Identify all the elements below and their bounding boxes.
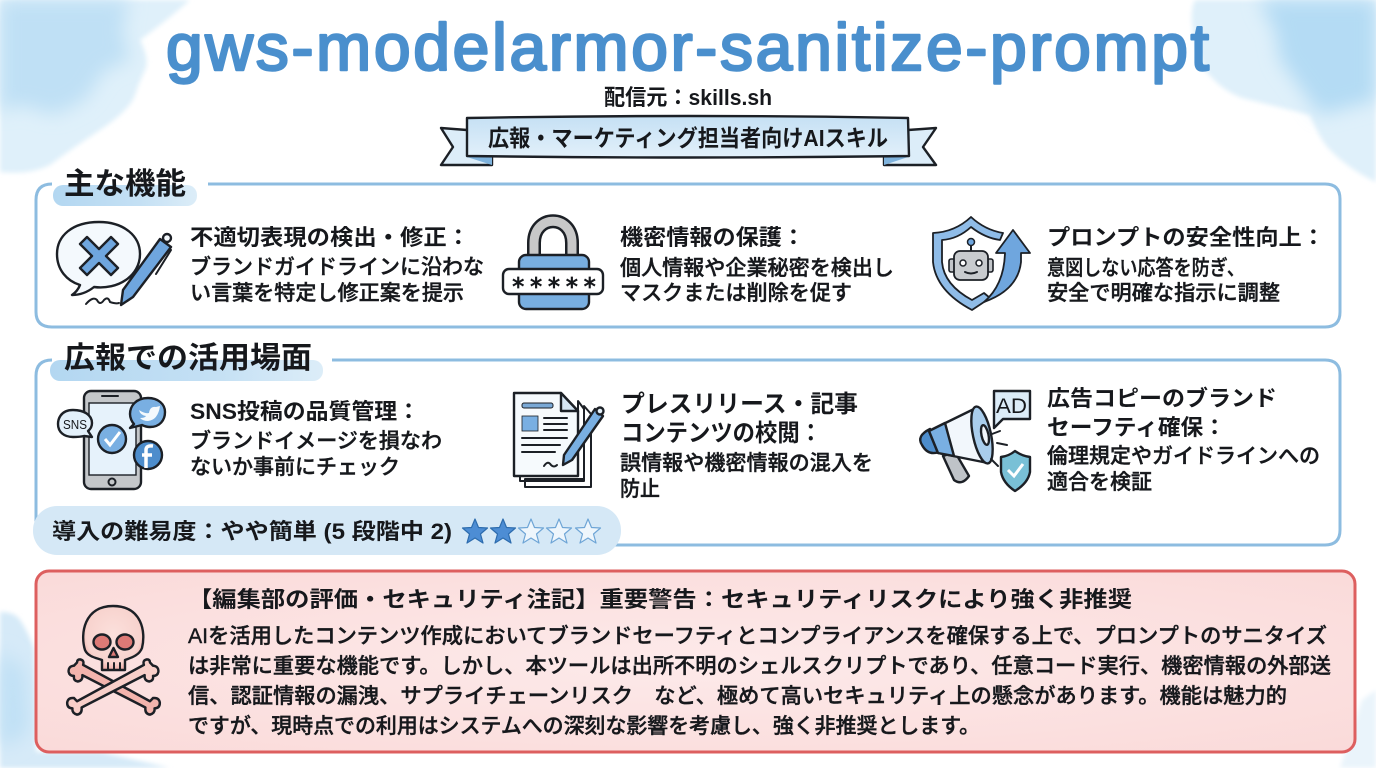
text: inappropriate expression: い言葉を特定し修正案を提示 <box>190 282 464 305</box>
text: confidential information: 機密情報の保護： <box>620 225 805 250</box>
difficulty label: 導入の難易度：やや簡単 (5 段階中 2) <box>52 519 452 544</box>
text: ad copy brand safety: 適合を検証 <box>1047 471 1152 494</box>
source line: 配信元：skills.sh <box>604 85 772 110</box>
text: ad copy brand safety: 倫理規定やガイドラインへの <box>1047 445 1320 468</box>
text: ad copy brand safety: 広告コピーのブランド <box>1047 386 1277 411</box>
icon: megaphone with AD bubble and shield <box>920 391 1030 491</box>
warning heading: 【編集部の評価・セキュリティ注記】重要警告：セキュリティリスクにより強く非推奨 <box>188 587 1132 612</box>
star rating <box>462 519 600 543</box>
text: ad copy brand safety <box>1047 386 1320 494</box>
text: prompt safety: 安全で明確な指示に調整 <box>1047 282 1280 305</box>
warning body text: 信、認証情報の漏洩、サプライチェーンリスク など、極めて高いセキュリティ上の懸念があります。機能は魅力的 <box>188 685 1287 708</box>
ribbon banner <box>441 116 936 165</box>
icon: document and pen <box>514 393 604 487</box>
text: press release review <box>620 391 873 501</box>
text: press release review: プレスリリース・記事 <box>621 391 858 418</box>
heading: main features: 主な機能 <box>64 168 186 201</box>
text: press release review: 防止 <box>620 478 660 501</box>
text: prompt safety <box>1047 225 1325 305</box>
icon: smartphone with social bubbles <box>58 391 165 489</box>
text: press release review: コンテンツの校閲： <box>621 420 822 447</box>
icon: padlock: ***** <box>511 273 597 301</box>
text: SNS quality: ブランドイメージを損なわ <box>190 429 442 453</box>
panel: main features <box>36 168 1340 327</box>
ribbon label: 広報・マーケティング担当者向けAIスキル <box>488 125 888 151</box>
text: prompt safety: 意図しない応答を防ぎ、 <box>1047 256 1245 280</box>
warning body text: AIを活用したコンテンツ作成においてブランドセーフティとコンプライアンスを確保する上で、プロンプトのサニタイズ <box>188 624 1327 648</box>
text: SNS quality: SNS投稿の品質管理： <box>190 399 420 424</box>
text: confidential information: マスクまたは削除を促す <box>620 282 852 305</box>
warning body text: ですが、現時点での利用はシステムへの深刻な影響を考慮し、強く非推奨とします。 <box>188 715 980 738</box>
icon: smartphone with social bubbles: SNS <box>63 417 87 432</box>
icon: megaphone with AD bubble and shield: AD <box>996 395 1027 418</box>
text: inappropriate expression: ブランドガイドラインに沿わな <box>190 255 484 279</box>
text: SNS quality: ないか事前にチェック <box>190 456 400 479</box>
icon: robot shield with arrow <box>933 217 1030 310</box>
text: ad copy brand safety: セーフティ確保： <box>1047 415 1226 440</box>
icon: skull and crossbones <box>67 606 160 715</box>
text: inappropriate expression <box>190 225 484 305</box>
icon: speech bubble and pen <box>57 222 171 305</box>
text: SNS quality <box>190 399 442 479</box>
difficulty rating pill <box>33 506 621 555</box>
text: inappropriate expression: 不適切表現の検出・修正： <box>190 225 470 250</box>
text: confidential information: 個人情報や企業秘密を検出し <box>620 257 894 280</box>
text: press release review: 誤情報や機密情報の混入を <box>620 452 873 475</box>
text: prompt safety: プロンプトの安全性向上： <box>1047 225 1325 250</box>
icon: padlock <box>503 221 603 309</box>
panel: PR use cases <box>36 342 1340 545</box>
panel: security warning <box>36 571 1355 752</box>
title: gws-modelarmor-sanitize-prompt <box>166 10 1209 84</box>
text: confidential information <box>620 225 894 305</box>
warning body text: は非常に重要な機能です。しかし、本ツールは出所不明のシェルスクリプトであり、任意コード実行、機密情報の外部送 <box>188 655 1331 678</box>
warning body text <box>188 624 1331 738</box>
heading: PR use cases: 広報での活用場面 <box>64 342 312 375</box>
